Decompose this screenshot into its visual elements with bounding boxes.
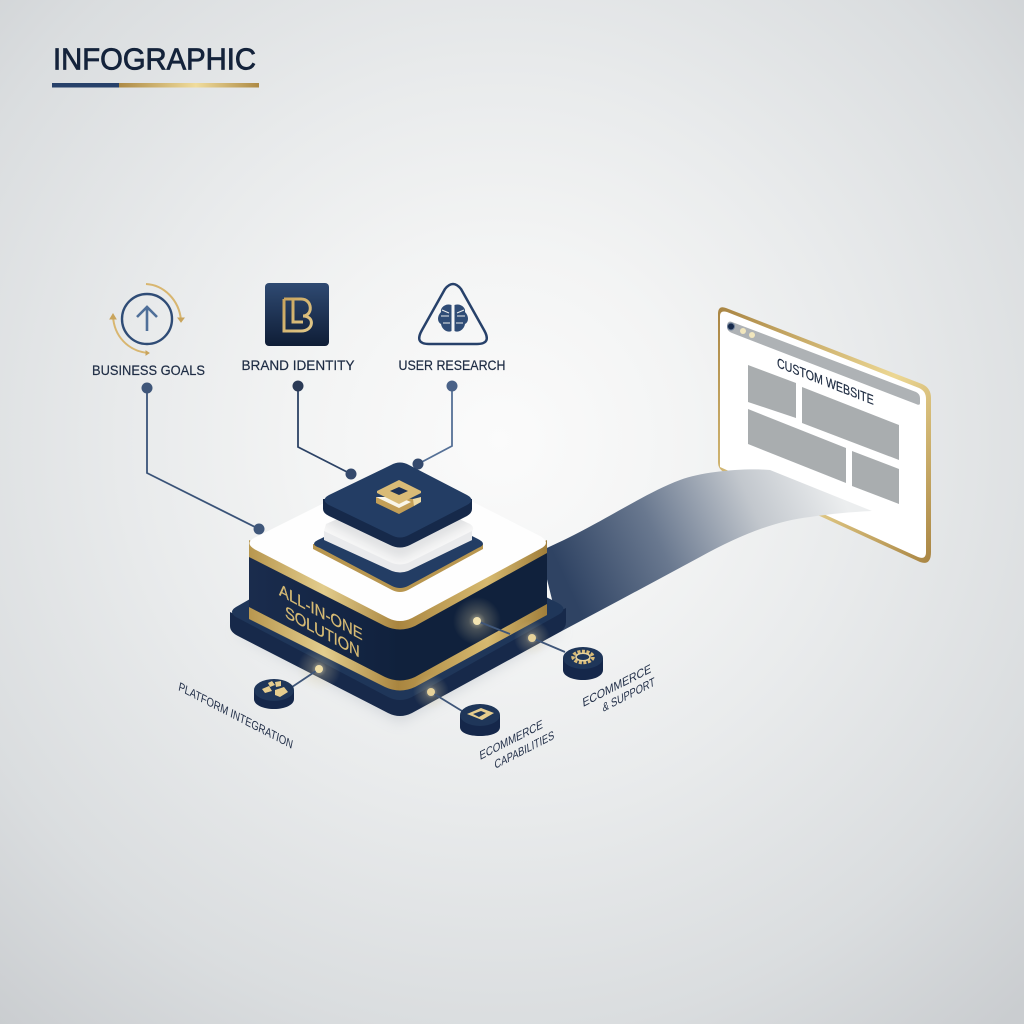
lower gold band [249,604,547,690]
label: user research: USER RESEARCH [398,357,506,373]
connector: business goals [142,382,264,534]
browser address bar [727,322,920,405]
label: ecommerce and support: ECOMMERCE [582,661,652,710]
upper gold band [249,540,547,630]
label: ecommerce capabilities: CAPABILITIES [494,728,555,772]
label: brand identity: BRAND IDENTITY [242,357,355,373]
middle navy tier with gold edge [313,502,483,592]
icon: user research [419,284,487,344]
main body faces [249,550,547,690]
label: ecommerce capabilities: ECOMMERCE [479,717,543,763]
icon: business goals [110,284,184,355]
top navy slab [323,462,472,548]
white tier [324,520,473,572]
ground shadow [232,630,566,722]
node: platform integration [254,647,341,709]
content blocks [748,365,899,504]
browser window: custom website [718,307,931,563]
connector: brand identity [292,380,356,480]
white top surface [250,468,546,621]
icon: stacked layers [376,480,421,514]
ribbon: flow to website [540,469,872,632]
connector: user research [412,380,458,470]
node: ecommerce and support [453,597,603,680]
title: INFOGRAPHIC [53,42,256,76]
isometric platform [230,462,566,722]
label: ecommerce and support: & SUPPORT [602,674,656,715]
icon: brand identity [265,283,329,346]
heading: all-in-one solution: SOLUTION [285,602,360,662]
label: platform integration: PLATFORM INTEGRATION [177,679,294,752]
browser dots [728,323,755,338]
base plate [230,594,566,716]
node: ecommerce capabilities [413,674,500,736]
label: business goals: BUSINESS GOALS [92,362,205,378]
heading: all-in-one solution: ALL-IN-ONE [279,580,363,645]
browser heading: CUSTOM WEBSITE [777,355,874,408]
